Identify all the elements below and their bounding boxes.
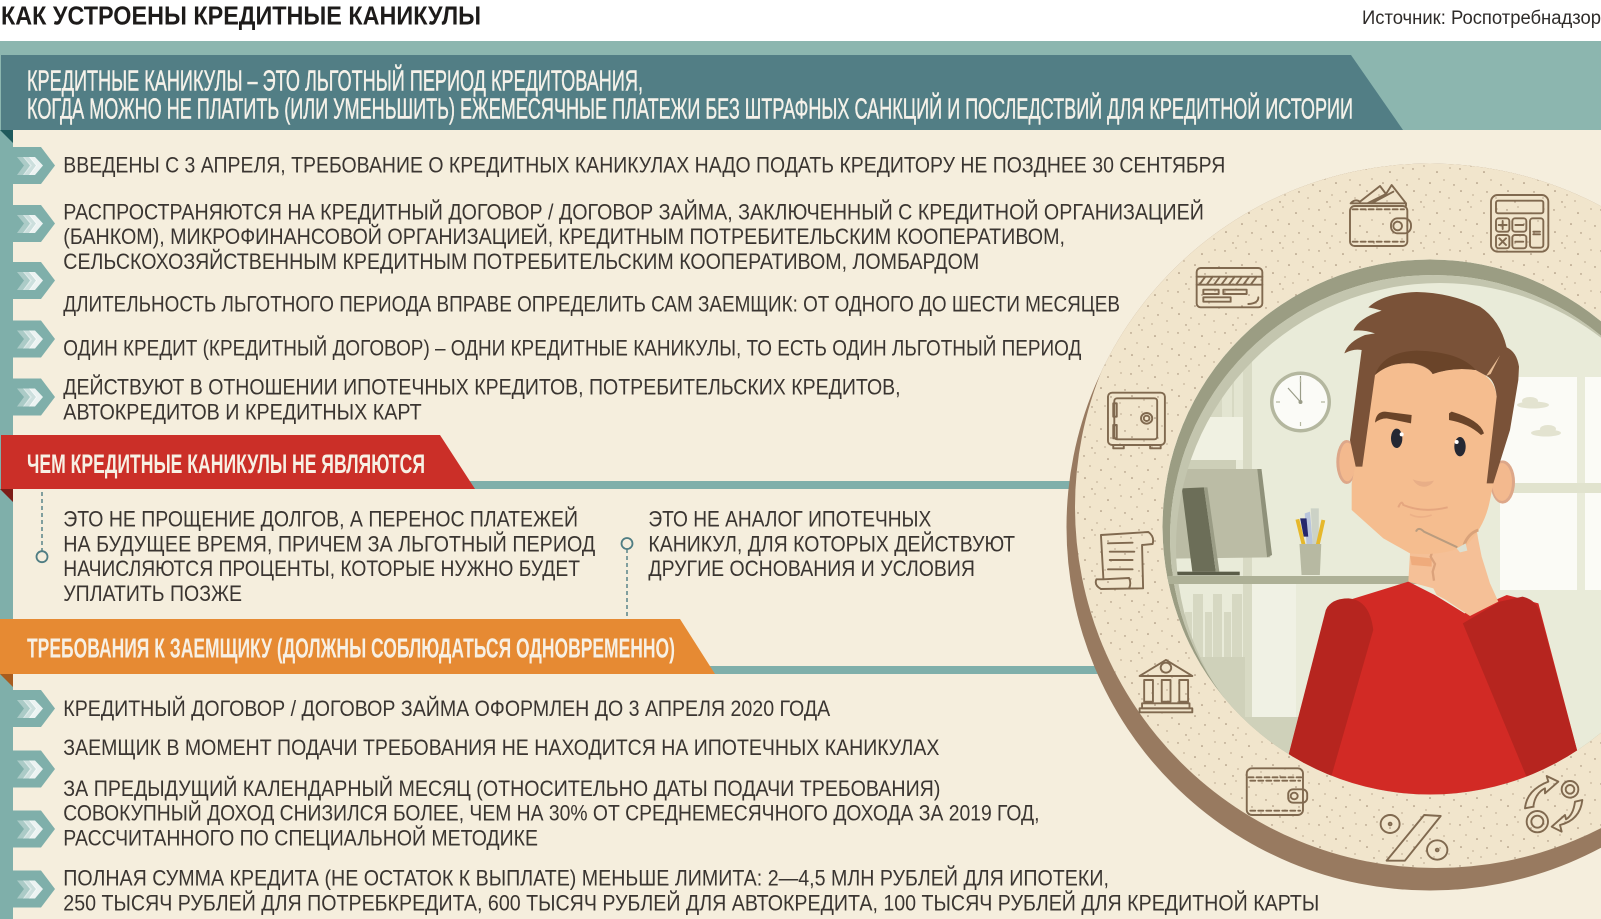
requirement 4: 250 ТЫСЯЧ РУБЛЕЙ ДЛЯ ПОТРЕБКРЕДИТА, 600 ТЫСЯЧ РУБЛЕЙ ДЛЯ АВТОКРЕДИТА, 100 ТЫСЯЧ РУБЛЕЙ ДЛЯ КРЕДИТНОЙ КАРТЫ	[63, 890, 1319, 916]
item 5: ДЕЙСТВУЮТ В ОТНОШЕНИИ ИПОТЕЧНЫХ КРЕДИТОВ, ПОТРЕБИТЕЛЬСКИХ КРЕДИТОВ,	[63, 374, 901, 400]
requirement 3	[63, 776, 1040, 850]
eyebrows	[1375, 412, 1484, 435]
requirement 4	[63, 866, 1319, 916]
section: borrower requirements	[0, 619, 1115, 687]
arrow tab 7	[0, 750, 55, 788]
wall clock	[1270, 372, 1331, 432]
note right: ЭТО НЕ АНАЛОГ ИПОТЕЧНЫХ	[648, 506, 932, 532]
red sweater	[1285, 582, 1581, 803]
arrow tab 5	[0, 378, 55, 416]
requirement 3: СОВОКУПНЫЙ ДОХОД СНИЗИЛСЯ БОЛЕЕ, ЧЕМ НА 30% ОТ СРЕДНЕМЕСЯЧНОГО ДОХОДА ЗА 2019 ГОД,	[63, 800, 1040, 825]
face	[1350, 363, 1497, 554]
icon: exchange arrows	[1525, 776, 1582, 832]
red heading: ЧЕМ КРЕДИТНЫЕ КАНИКУЛЫ НЕ ЯВЛЯЮТСЯ	[27, 449, 425, 479]
icon: safe	[1108, 393, 1165, 448]
item 1: ВВЕДЕНЫ С 3 АПРЕЛЯ, ТРЕБОВАНИЕ О КРЕДИТНЫХ КАНИКУЛАХ НАДО ПОДАТЬ КРЕДИТОРУ НЕ ПОЗДНЕЕ 30 СЕНТЯБРЯ	[63, 152, 1225, 178]
arrow tab 6	[0, 690, 55, 727]
item 3: ДЛИТЕЛЬНОСТЬ ЛЬГОТНОГО ПЕРИОДА ВПРАВЕ ОПРЕДЕЛИТЬ САМ ЗАЕМЩИК: ОТ ОДНОГО ДО ШЕСТИ МЕСЯЦЕВ	[63, 292, 1120, 316]
section: what holidays are not	[0, 435, 1080, 502]
title: КАК УСТРОЕНЫ КРЕДИТНЫЕ КАНИКУЛЫ	[1, 0, 481, 30]
requirement 3: ЗА ПРЕДЫДУЩИЙ КАЛЕНДАРНЫЙ МЕСЯЦ (ОТНОСИТЕЛЬНО ДАТЫ ПОДАЧИ ТРЕБОВАНИЯ)	[63, 776, 940, 801]
illustration: round frame with man	[1066, 146, 1601, 890]
item 2: РАСПРОСТРАНЯЮТСЯ НА КРЕДИТНЫЙ ДОГОВОР / ДОГОВОР ЗАЙМА, ЗАКЛЮЧЕННЫЙ С КРЕДИТНОЙ ОРГАНИЗАЦИЕЙ	[63, 199, 1204, 224]
item 5: АВТОКРЕДИТОВ И КРЕДИТНЫХ КАРТ	[63, 400, 422, 424]
icon: wallet with cards	[1350, 185, 1411, 246]
frame bands	[1162, 260, 1601, 801]
eyes	[1391, 429, 1466, 456]
item 4: ОДИН КРЕДИТ (КРЕДИТНЫЙ ДОГОВОР) – ОДНИ КРЕДИТНЫЕ КАНИКУЛЫ, ТО ЕСТЬ ОДИН ЛЬГОТНЫЙ ПЕРИОД	[63, 336, 1081, 361]
arrow tab 9	[0, 870, 55, 908]
requirement 2: ЗАЕМЩИК В МОМЕНТ ПОДАЧИ ТРЕБОВАНИЯ НЕ НАХОДИТСЯ НА ИПОТЕЧНЫХ КАНИКУЛАХ	[63, 735, 940, 760]
banner text: КРЕДИТНЫЕ КАНИКУЛЫ – ЭТО ЛЬГОТНЫЙ ПЕРИОД КРЕДИТОВАНИЯ,	[27, 64, 643, 98]
man	[1285, 292, 1581, 803]
note left: ЭТО НЕ ПРОЩЕНИЕ ДОЛГОВ, А ПЕРЕНОС ПЛАТЕЖЕЙ	[63, 506, 578, 532]
item 2: (БАНКОМ), МИКРОФИНАНСОВОЙ ОРГАНИЗАЦИЕЙ, КРЕДИТНЫМ ПОТРЕБИТЕЛЬСКИМ КООПЕРАТИВОМ,	[63, 224, 1065, 249]
bullet list: features	[0, 147, 1225, 424]
note right: КАНИКУЛ, ДЛЯ КОТОРЫХ ДЕЙСТВУЮТ	[648, 532, 1015, 556]
computer monitor	[1169, 469, 1272, 575]
note left: УПЛАТИТЬ ПОЗЖЕ	[63, 581, 242, 606]
hair	[1344, 292, 1519, 483]
arrow tab 8	[0, 810, 55, 848]
icon: bank building	[1140, 660, 1192, 712]
office window scene	[1150, 250, 1601, 811]
icon: bank card	[1197, 268, 1262, 307]
arrow tab 3	[0, 262, 55, 299]
clouds	[1517, 397, 1561, 436]
arrow tab 4	[0, 320, 55, 358]
item 2	[63, 199, 1204, 274]
note left	[36, 492, 595, 606]
source note: Источник: Роспотребнадзор	[1362, 8, 1601, 29]
icon: wallet	[1247, 768, 1307, 815]
icon: scroll	[1096, 532, 1153, 589]
orange heading: ТРЕБОВАНИЯ К ЗАЕМЩИКУ (ДОЛЖНЫ СОБЛЮДАТЬСЯ ОДНОВРЕМЕННО)	[27, 632, 675, 664]
item 2: СЕЛЬСКОХОЗЯЙСТВЕННЫМ КРЕДИТНЫМ ПОТРЕБИТЕЛЬСКИМ КООПЕРАТИВОМ, ЛОМБАРДОМ	[63, 249, 979, 274]
head, neck and hand	[1336, 292, 1519, 616]
neck and hand	[1408, 530, 1498, 616]
left teal strip	[0, 130, 13, 919]
requirement 3: РАССЧИТАННОГО ПО СПЕЦИАЛЬНОЙ МЕТОДИКЕ	[63, 826, 538, 850]
bullet list: requirements	[0, 690, 1319, 916]
banner text	[27, 64, 1353, 126]
definition banner	[0, 55, 1403, 143]
icon: calculator	[1491, 195, 1548, 252]
requirement 4: ПОЛНАЯ СУММА КРЕДИТА (НЕ ОСТАТОК К ВЫПЛАТЕ) МЕНЬШЕ ЛИМИТА: 2—4,5 МЛН РУБЛЕЙ ДЛЯ ИПОТЕКИ,	[63, 866, 1109, 891]
note right: ДРУГИЕ ОСНОВАНИЯ И УСЛОВИЯ	[648, 556, 975, 581]
pencil cup	[1297, 508, 1323, 575]
requirement 1: КРЕДИТНЫЙ ДОГОВОР / ДОГОВОР ЗАЙМА ОФОРМЛЕН ДО 3 АПРЕЛЯ 2020 ГОДА	[63, 696, 830, 721]
arrow tab 1	[0, 147, 55, 184]
arrow tab 2	[0, 205, 55, 242]
icon: percent	[1381, 815, 1447, 861]
note left: НАЧИСЛЯЮТСЯ ПРОЦЕНТЫ, КОТОРЫЕ НУЖНО БУДЕТ	[63, 556, 580, 581]
item 5	[63, 374, 901, 424]
teal top band	[0, 41, 1601, 130]
note right	[622, 506, 1015, 619]
shelf	[1168, 576, 1418, 584]
note left: НА БУДУЩЕЕ ВРЕМЯ, ПРИЧЕМ ЗА ЛЬГОТНЫЙ ПЕРИОД	[63, 532, 595, 556]
ears	[1336, 440, 1515, 504]
nose, mouth and fingers	[1398, 479, 1478, 552]
